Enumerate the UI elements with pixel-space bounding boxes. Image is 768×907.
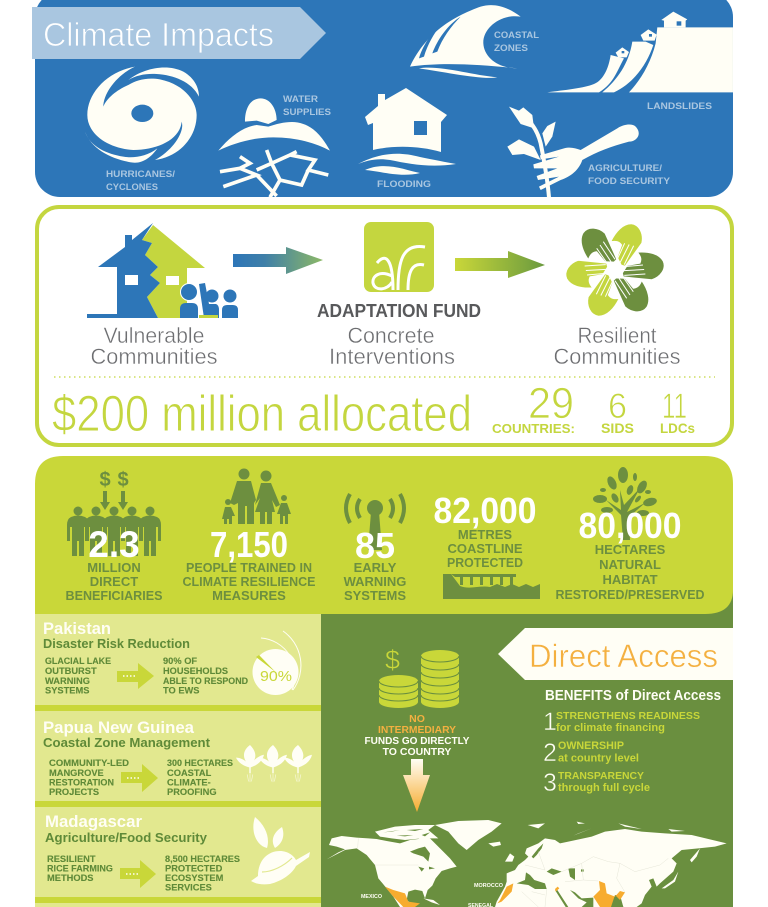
stat: 85 warning systems: 85 — [355, 525, 395, 566]
icon: warning tower — [346, 494, 404, 550]
text: resilient communities — [554, 323, 680, 369]
benefit 3: 3 — [543, 769, 557, 797]
icon: beneficiaries: $ — [117, 469, 129, 491]
panel: Pakistan: SYSTEMS — [45, 686, 89, 696]
stat: 2.3 million: BENEFICIARIES — [66, 588, 163, 603]
chart: world map — [327, 820, 727, 907]
panel: Pakistan: ABLE TO RESPOND — [163, 676, 248, 686]
icon: beneficiaries: $ — [99, 469, 111, 491]
panel: Madagascar — [35, 807, 321, 897]
text: resilient communities: Resilient — [578, 323, 656, 348]
panel: Pakistan: 90% OF — [163, 656, 197, 666]
panel: Papua New Guinea: Coastal Zone Management — [43, 735, 211, 750]
stat: 29 countries — [492, 379, 575, 436]
panel: Pakistan: TO EWS — [163, 686, 200, 696]
stat: 6 SIDS: SIDS — [601, 420, 634, 436]
panel: dark green background — [321, 585, 733, 907]
text: no intermediary: NO — [409, 713, 425, 725]
arrow: blue to green — [233, 247, 323, 274]
arrow — [117, 663, 154, 689]
label: food security: FOOD SECURITY — [588, 176, 671, 187]
stat: 80000 hectares: HECTARES — [595, 542, 666, 557]
stat: 7150 trained: 7,150 — [210, 524, 288, 565]
stat: 6 SIDS — [601, 387, 634, 436]
stat: 85 warning systems — [344, 525, 406, 603]
stat: 29 countries: COUNTRIES: — [492, 421, 575, 436]
text: no intermediary — [364, 713, 470, 758]
text: resilient communities: Communities — [554, 344, 680, 369]
panel: Papua New Guinea: RESTORATION — [49, 778, 114, 788]
stat: 85 warning systems: WARNING — [344, 574, 406, 589]
panel: Pakistan: WARNING — [45, 676, 90, 686]
panel: results — [35, 456, 733, 614]
text: vulnerable communities: Communities — [90, 344, 218, 369]
benefit 2: 2 — [543, 739, 557, 767]
icon: coastal wave — [410, 5, 521, 78]
icon: 90 percent dial: 90% — [260, 668, 292, 685]
benefit 2: at country level — [558, 752, 639, 764]
label: hurricanes: HURRICANES/ — [106, 169, 175, 180]
panel: Papua New Guinea — [35, 711, 321, 801]
icon: fork and wheat — [507, 107, 639, 197]
text: no intermediary: TO COUNTRY — [383, 746, 451, 758]
stat: 85 warning systems: EARLY — [354, 560, 397, 575]
icon: water supplies — [218, 98, 330, 197]
stat: 82000 metres — [434, 490, 536, 570]
map: Americas and Greenland — [327, 820, 502, 907]
label: coastal: COASTAL — [494, 30, 539, 41]
panel: Papua New Guinea: 300 HECTARES — [167, 758, 233, 768]
panel: Madagascar: Agriculture/Food Security — [45, 830, 208, 845]
stat: 82000 metres: COASTLINE — [447, 541, 523, 556]
label: landslides: LANDSLIDES — [647, 101, 712, 112]
panel: Pakistan — [35, 614, 321, 705]
stat: 7150 trained: PEOPLE TRAINED IN — [186, 560, 312, 575]
benefit 1: 1 — [543, 708, 557, 736]
arrow — [121, 764, 158, 792]
panel: direct access — [327, 628, 733, 907]
map label: Morocco: MOROCCO — [474, 883, 504, 889]
panel: Pakistan: Disaster Risk Reduction — [43, 636, 190, 651]
arrow: funds down — [403, 759, 430, 812]
stat: 2.3 million: DIRECT — [90, 574, 138, 589]
panel: theory of change — [37, 207, 732, 445]
icon: mangrove seedlings — [236, 745, 312, 782]
panel: Papua New Guinea: MANGROVE — [49, 768, 104, 778]
stat: 85 warning systems: SYSTEMS — [344, 588, 406, 603]
stat: 80000 hectares — [556, 505, 704, 602]
text: concrete interventions — [329, 323, 455, 369]
icon: tree — [593, 467, 658, 540]
benefit 3: through full cycle — [558, 782, 650, 794]
text: vulnerable communities: Vulnerable — [104, 323, 204, 348]
panel: Papua New Guinea: COMMUNITY-LED — [49, 758, 129, 768]
benefit 1 — [543, 708, 700, 736]
icon: beneficiaries — [67, 469, 161, 556]
benefit 1: for climate financing — [556, 722, 665, 734]
label: flooding: FLOODING — [377, 179, 431, 190]
heading: benefits: BENEFITS of Direct Access — [545, 688, 721, 704]
stat: 11 LDCs: 11 — [662, 387, 687, 426]
panel: Madagascar: METHODS — [47, 873, 94, 883]
panel: Madagascar: SERVICES — [165, 882, 212, 892]
benefit 1: STRENGTHENS READINESS — [556, 710, 700, 722]
arrow: green — [455, 251, 545, 278]
stat: 82000 metres: PROTECTED — [447, 555, 523, 570]
panel: Madagascar: RICE FARMING — [47, 864, 113, 874]
map label: Mexico: MEXICO — [361, 894, 383, 900]
panel: Papua New Guinea: COASTAL — [167, 768, 212, 778]
icon: coin stacks: $ — [385, 645, 400, 675]
panel: Madagascar: RESILIENT — [47, 854, 96, 864]
panel: Madagascar: 8,500 HECTARES — [165, 854, 240, 864]
label: cyclones: CYCLONES — [106, 182, 158, 193]
stat: 6 SIDS: 6 — [608, 387, 627, 426]
stat: 80000 hectares: HABITAT — [602, 572, 658, 587]
label: water: WATER — [283, 94, 318, 105]
icon: 90 percent dial — [252, 631, 301, 695]
stat: 2.3 million: MILLION — [87, 560, 141, 575]
benefit 2 — [543, 739, 639, 767]
stat: 80000 hectares: NATURAL — [599, 557, 661, 572]
stat: 7150 trained: MEASURES — [212, 588, 286, 603]
arrow — [120, 860, 156, 888]
stat: 82000 metres: 82,000 — [434, 490, 536, 531]
benefit 2: OWNERSHIP — [558, 740, 624, 752]
panel: Pakistan: HOUSEHOLDS — [163, 666, 228, 676]
text: no intermediary: INTERMEDIARY — [378, 724, 456, 736]
stat: 29 countries: 29 — [528, 379, 574, 428]
label: zones: ZONES — [494, 43, 528, 54]
map: Eurasia and Africa — [495, 822, 727, 907]
panel: case studies — [35, 610, 321, 907]
stat: 80000 hectares: 80,000 — [578, 505, 682, 546]
panel: Madagascar: PROTECTED — [165, 864, 223, 874]
stat: 2.3 million — [66, 524, 163, 603]
icon: adaptation fund logo — [364, 222, 434, 292]
panel: climate impacts — [32, 0, 733, 197]
banner: Climate Impacts — [32, 7, 326, 59]
banner: Climate Impacts: Climate Impacts — [43, 16, 274, 53]
panel: Pakistan: Pakistan — [43, 620, 111, 638]
stat: 80000 hectares: RESTORED/PRESERVED — [556, 587, 704, 602]
stat: 7150 trained — [182, 524, 316, 603]
icon: resilient hands — [562, 220, 668, 320]
panel: Papua New Guinea: Papua New Guinea — [43, 719, 195, 737]
icon: landslide — [547, 12, 733, 92]
icon: family — [222, 468, 291, 524]
panel: Papua New Guinea: PROJECTS — [49, 787, 99, 797]
panel: Madagascar: Madagascar — [45, 813, 143, 831]
benefit 3: TRANSPARENCY — [558, 770, 644, 782]
stat: 82000 metres: METRES — [458, 527, 512, 542]
text: concrete interventions: Concrete — [348, 323, 434, 348]
banner: Direct Access: Direct Access — [529, 638, 718, 674]
panel: Pakistan: OUTBURST — [45, 666, 97, 676]
panel: Papua New Guinea: CLIMATE- — [167, 778, 211, 788]
panel: Papua New Guinea: PROOFING — [167, 787, 217, 797]
icon: split house with people — [87, 223, 238, 318]
heading: adaptation fund: ADAPTATION FUND — [317, 301, 481, 321]
icon: coastline ruler — [443, 574, 540, 599]
icon: coin stacks — [379, 645, 459, 708]
panel: Pakistan: GLACIAL LAKE — [45, 656, 111, 666]
text: concrete interventions: Interventions — [329, 344, 455, 369]
benefit 3 — [543, 769, 650, 797]
stat: 11 LDCs: LDCs — [660, 420, 695, 436]
banner: Direct Access — [498, 628, 733, 680]
stat: 200 million allocated: $200 million allocated — [52, 385, 472, 442]
icon: hurricane — [85, 67, 199, 163]
stat: 2.3 million: 2.3 — [88, 524, 140, 565]
label: agriculture: AGRICULTURE/ — [588, 163, 662, 174]
label: supplies: SUPPLIES — [283, 107, 331, 118]
stat: 7150 trained: CLIMATE RESILIENCE — [182, 574, 316, 589]
text: vulnerable communities — [90, 323, 218, 369]
icon: flooding house — [358, 88, 456, 175]
panel: Madagascar: ECOSYSTEM — [165, 873, 224, 883]
text: no intermediary: FUNDS GO DIRECTLY — [364, 735, 470, 747]
icon: hand with seedling — [251, 817, 310, 884]
